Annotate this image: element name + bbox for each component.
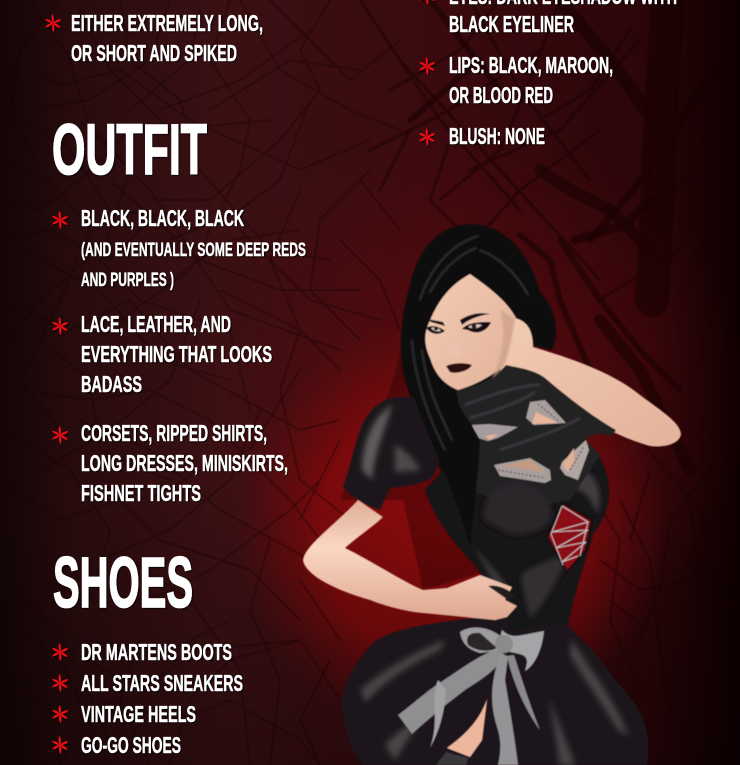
makeup item: eyes: [449, 0, 677, 37]
bullet: [418, 57, 436, 75]
bullet: [51, 317, 69, 335]
corset lace-up panel: [547, 503, 592, 572]
bare leg: [447, 699, 487, 757]
bullet: [51, 426, 69, 444]
figure: gothic woman: [303, 224, 681, 765]
outfit item: materials: EVERYTHING THAT LOOKS: [81, 341, 272, 367]
eyes: [426, 322, 491, 334]
outfit item: materials: BADASS: [81, 371, 142, 397]
scarf folds: [465, 385, 580, 450]
puff sleeve: [343, 397, 445, 510]
shoe item: VINTAGE HEELS: [81, 701, 196, 727]
makeup item: lips: OR BLOOD RED: [449, 82, 553, 108]
stocking: [436, 752, 468, 765]
outfit list: [51, 205, 306, 506]
face: [425, 274, 516, 390]
outfit item: colours: AND PURPLES ): [81, 270, 174, 291]
face shadow: [492, 310, 514, 378]
bodice: [425, 440, 609, 630]
nose: [448, 345, 463, 357]
lower arm and hand: [303, 500, 517, 620]
outfit item: garments: CORSETS, RIPPED SHIRTS,: [81, 420, 267, 446]
shoe item: DR MARTENS BOOTS: [81, 639, 232, 665]
hair item: OR SHORT AND SPIKED: [71, 40, 237, 66]
sheer cape behind figure: [340, 345, 490, 590]
outfit item: colours: (AND EVENTUALLY SOME DEEP REDS: [81, 240, 306, 261]
hair back: [401, 224, 556, 505]
lips: [446, 363, 472, 373]
shoe item: ALL STARS SNEAKERS: [81, 670, 243, 696]
raised arm: [500, 318, 681, 446]
finger shadow: [488, 586, 515, 600]
hair highlights: [412, 236, 528, 450]
lace at chest: [472, 400, 589, 483]
bodice highlights: [470, 470, 600, 620]
bust shading: [483, 482, 552, 535]
makeup item: lips: LIPS: BLACK, MAROON,: [449, 52, 613, 78]
bullet: [51, 705, 69, 723]
makeup list: [418, 0, 677, 149]
outfit item: colours: BLACK, BLACK, BLACK: [81, 205, 244, 231]
makeup item: lips: [449, 52, 613, 108]
bullet: [418, 128, 436, 146]
scarf and ragged top: [456, 365, 616, 510]
makeup item: blush: BLUSH: NONE: [449, 123, 545, 149]
hair item: [71, 10, 263, 66]
shoes list: [51, 639, 243, 758]
bullet: [51, 674, 69, 692]
outfit item: garments: FISHNET TIGHTS: [81, 480, 201, 506]
grey bow ribbon: [398, 627, 544, 765]
skirt highlights: [360, 640, 628, 765]
lace speckle: [498, 404, 584, 478]
outfit item: garments: [81, 420, 288, 506]
outfit item: materials: [81, 311, 272, 397]
eyebrows: [427, 313, 490, 326]
shoe item: GO-GO SHOES: [81, 732, 181, 758]
bullet: [51, 643, 69, 661]
outfit item: garments: LONG DRESSES, MINISKIRTS,: [81, 450, 288, 476]
bullet: [51, 211, 69, 229]
makeup item: eyes: BLACK EYELINER: [449, 11, 574, 37]
heading: shoes: SHOES: [53, 544, 193, 623]
outfit item: materials: LACE, LEATHER, AND: [81, 311, 231, 337]
bullet: [51, 736, 69, 754]
hair item: EITHER EXTREMELY LONG,: [71, 10, 263, 36]
heading: outfit: OUTFIT: [52, 111, 207, 190]
bullet: [418, 0, 436, 5]
text column: hair style list: [44, 10, 263, 66]
sleeve highlights: [362, 405, 420, 480]
dress skirt: [342, 610, 648, 765]
bullet: [44, 14, 62, 32]
outfit item: colours: [81, 205, 306, 291]
front hair strand: [405, 226, 530, 545]
